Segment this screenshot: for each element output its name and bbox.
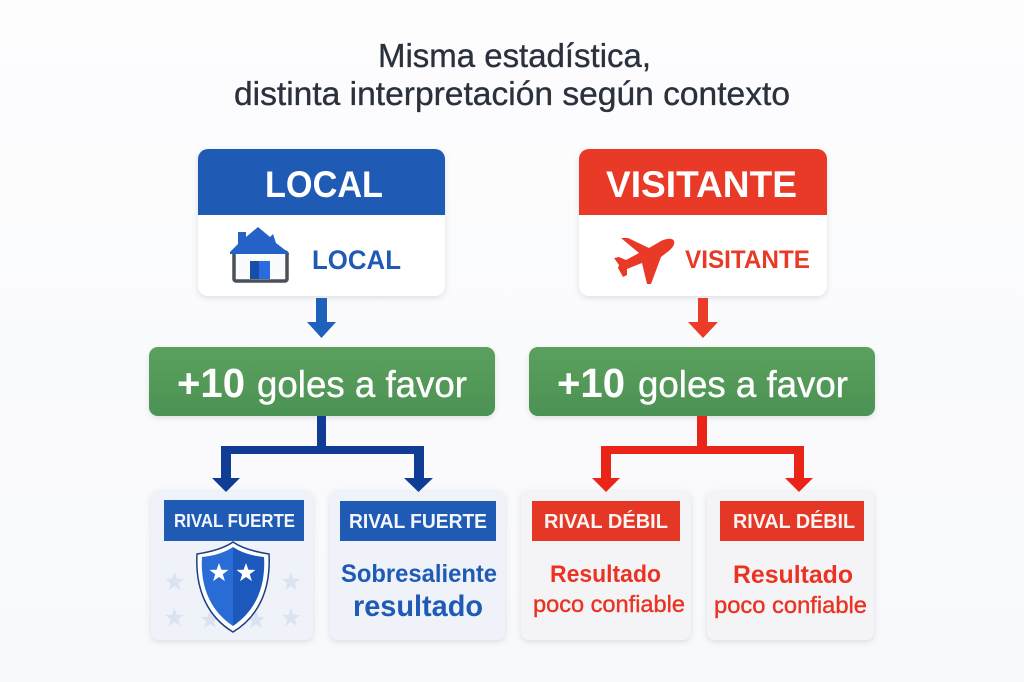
result text: poco confiable (533, 591, 685, 617)
panel: local stat: +10 (177, 360, 245, 406)
panel: rival debil one (521, 490, 691, 640)
panel: local stat (149, 347, 495, 416)
icon: shield (197, 542, 269, 632)
panel: visitante stat (529, 347, 875, 416)
visitante label: VISITANTE (685, 246, 810, 274)
icon: airplane (614, 238, 674, 284)
panel: local stat: goles a favor (257, 364, 467, 405)
panel: rival fuerte shield (151, 490, 313, 640)
rival label (164, 500, 304, 541)
result text (533, 561, 685, 617)
result text: resultado (353, 590, 483, 623)
panel: visitante card (579, 149, 827, 296)
panel: rival debil two (707, 490, 874, 640)
panel: visitante stat: goles a favor (638, 364, 848, 405)
rival label: RIVAL DÉBIL (733, 510, 855, 533)
arrow: local to stat (307, 298, 336, 338)
rival label (720, 501, 864, 541)
title: distinta interpretación según contexto (234, 75, 790, 112)
result text: Resultado (733, 561, 853, 589)
result text: Sobresaliente (341, 560, 497, 588)
arrow: local branch (212, 416, 433, 492)
title: Misma estadística, (378, 37, 651, 74)
rival label (340, 501, 496, 541)
panel: visitante stat: +10 (557, 360, 625, 406)
visitante header text: VISITANTE (606, 164, 797, 205)
rival label (532, 501, 680, 541)
rival label: RIVAL FUERTE (174, 511, 295, 531)
title (234, 37, 790, 112)
local header text: LOCAL (265, 164, 383, 205)
panel: rival fuerte result (330, 490, 505, 640)
result text (341, 560, 497, 623)
panel: local card (198, 149, 445, 296)
result text: poco confiable (714, 592, 867, 618)
icon: house (230, 227, 289, 281)
arrow: visitante to stat (688, 298, 718, 338)
decorative stars (165, 572, 300, 628)
rival label: RIVAL FUERTE (349, 511, 487, 533)
arrow: visitante branch (592, 416, 813, 492)
local label: LOCAL (312, 245, 401, 275)
result text: Resultado (550, 561, 661, 588)
result text (714, 561, 867, 618)
local header band (198, 149, 445, 215)
rival label: RIVAL DÉBIL (544, 510, 668, 533)
visitante header band (579, 149, 827, 215)
